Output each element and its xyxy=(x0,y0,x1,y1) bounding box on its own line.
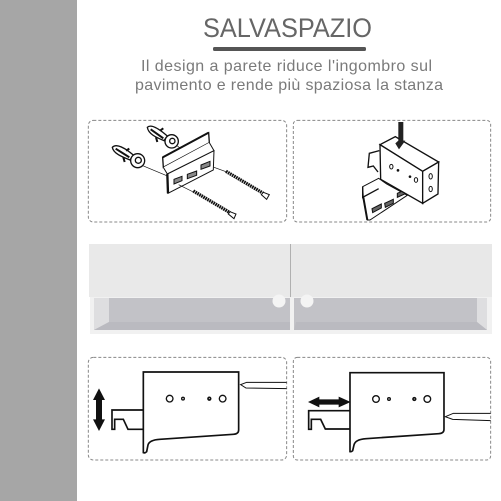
icon: rear hook xyxy=(368,151,379,172)
panel: horizontal adjustment xyxy=(293,357,491,460)
icon: cabinet side xyxy=(350,373,444,452)
icon: metal bracket xyxy=(163,133,214,193)
icon: hook bracket xyxy=(309,411,350,429)
panel: box hooked onto bracket xyxy=(293,120,491,222)
icon: upper screw xyxy=(214,167,269,199)
icon: cabinet box xyxy=(380,137,439,203)
icon: lower wall plug xyxy=(112,146,167,176)
icon: lower bracket xyxy=(363,178,407,220)
title underline xyxy=(213,47,366,51)
icon: screwdriver xyxy=(445,413,491,421)
icon: hook bracket xyxy=(112,410,144,429)
left door xyxy=(89,244,290,297)
title: SALVASPAZIO xyxy=(203,13,372,43)
right compartment xyxy=(294,298,487,330)
arrow: horizontal double xyxy=(308,397,351,407)
right door xyxy=(291,244,492,297)
subtitle: pavimento e rende più spaziosa la stanza xyxy=(135,77,443,94)
left compartment xyxy=(94,298,290,330)
icon: screwdriver xyxy=(241,382,287,389)
icon: upper wall plug xyxy=(147,126,187,153)
arrow: vertical double xyxy=(93,388,105,431)
subtitle xyxy=(135,58,443,94)
open shelf frame xyxy=(90,297,492,334)
panel: vertical adjustment xyxy=(88,357,287,460)
right handle xyxy=(300,294,314,308)
left handle xyxy=(272,294,286,308)
icon: lower screw xyxy=(179,185,236,219)
panel: wall bracket with plugs and screws xyxy=(88,120,287,222)
grey sidebar xyxy=(0,0,77,501)
subtitle: Il design a parete riduce l'ingombro sul xyxy=(141,58,432,75)
photo: wall unit xyxy=(89,244,492,334)
icon: cabinet side xyxy=(143,372,239,453)
arrow: downward xyxy=(395,122,405,149)
